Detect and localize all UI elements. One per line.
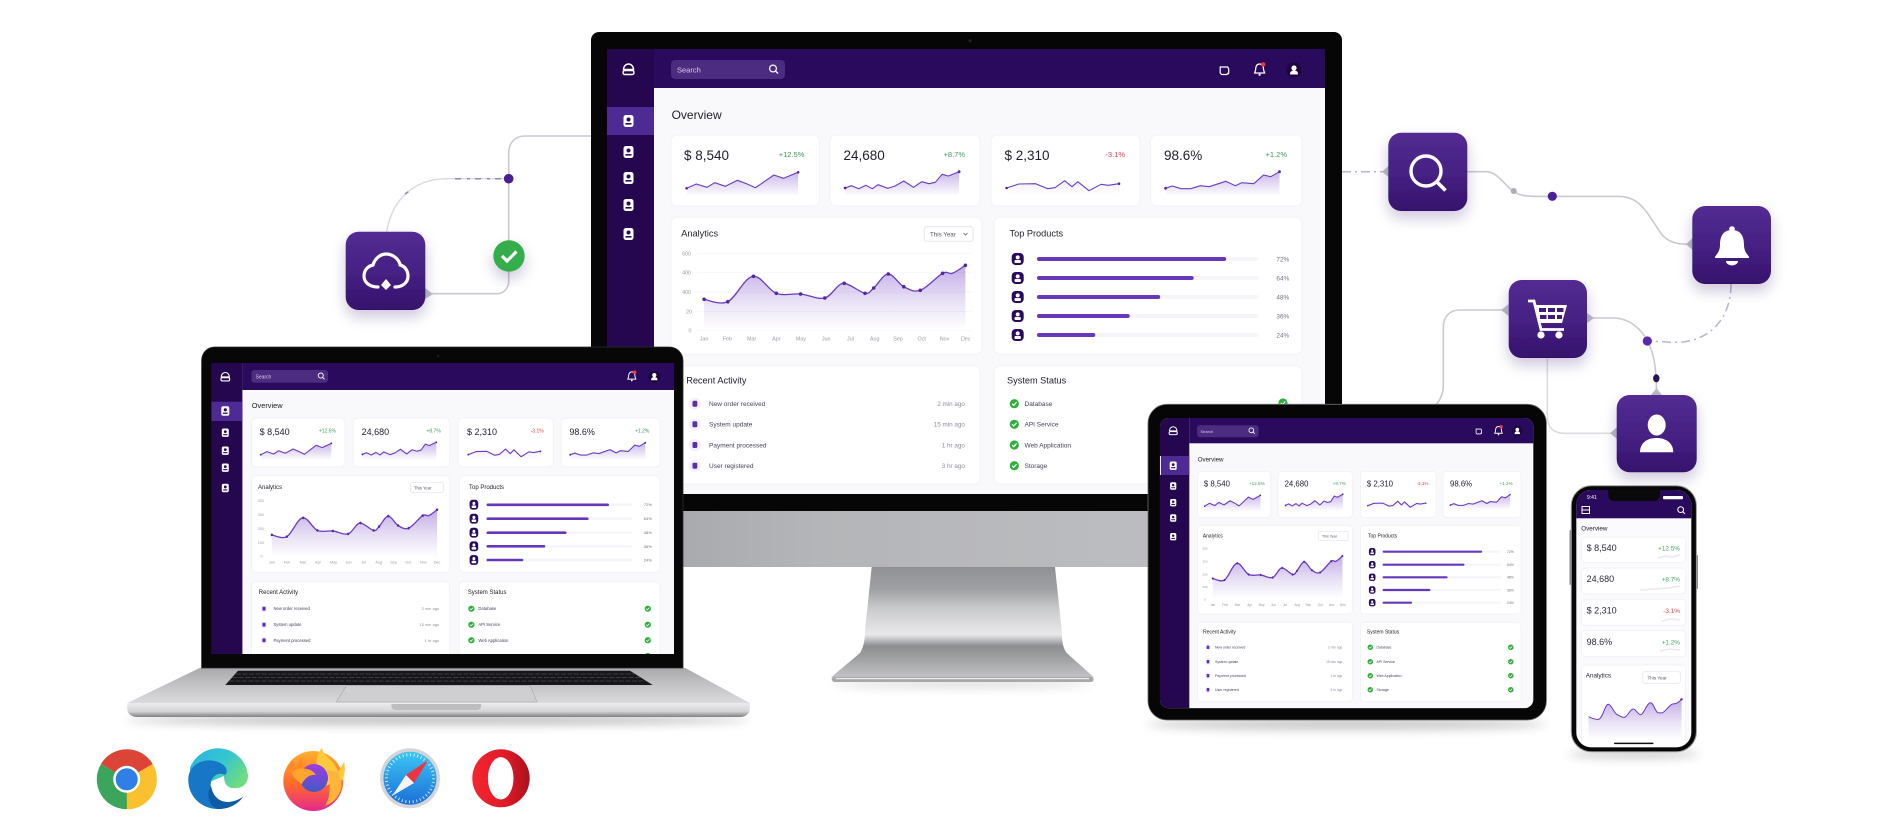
- laptop system status panel: System Status: [468, 590, 506, 596]
- laptop shadow: [126, 716, 750, 724]
- tablet system status panel: [1360, 622, 1521, 702]
- laptop analytics panel: Jun: [346, 561, 352, 565]
- KPI card: cost: [991, 135, 1140, 206]
- tablet top products panel: 24%: [1507, 601, 1514, 605]
- panel: recent activity: Payment processed: [709, 442, 767, 449]
- laptop recent activity panel: 15 min ago: [419, 622, 440, 627]
- tablet analytics panel: Oct: [1318, 603, 1323, 607]
- panel: analytics chart: Nov: [940, 337, 950, 343]
- tablet KPI cards: +8.7%: [1333, 481, 1346, 486]
- panel: analytics chart: Apr: [772, 337, 781, 343]
- tablet analytics panel: Nov: [1329, 603, 1335, 607]
- panel: analytics chart: This Year: [930, 232, 956, 238]
- tablet system status panel: API Service: [1376, 660, 1395, 664]
- tablet recent activity panel: User registered: [1215, 688, 1239, 692]
- laptop top products panel: 48%: [644, 530, 652, 535]
- monitor screen background: [607, 49, 1325, 494]
- laptop system status panel: Web Application: [478, 638, 509, 643]
- phone home indicator: [1614, 743, 1654, 744]
- phone analytics panel: [1582, 665, 1686, 755]
- panel: system status: Web Application: [1024, 442, 1071, 449]
- tablet top products panel: Top Products: [1368, 533, 1398, 539]
- laptop analytics panel: May: [330, 561, 337, 565]
- laptop analytics panel: Aug: [375, 561, 382, 565]
- panel: analytics chart: Jun: [822, 337, 831, 343]
- icon: user tile: [1617, 395, 1697, 472]
- phone KPI list: 98.6%: [1587, 637, 1612, 647]
- panel: analytics chart: Feb: [723, 337, 732, 343]
- KPI card: uptime: +1.2%: [1266, 150, 1287, 159]
- tablet system status panel: Storage: [1376, 688, 1389, 692]
- panel: recent activity: New order received: [709, 401, 766, 408]
- tablet screen: [1160, 418, 1533, 708]
- connector lines: left of monitor: [387, 136, 591, 299]
- laptop KPI cards: +1.2%: [635, 429, 650, 435]
- laptop top bar: Search: [256, 374, 272, 380]
- tablet recent activity panel: 1 hr ago: [1330, 674, 1343, 678]
- phone KPI list: -3.1%: [1663, 608, 1680, 615]
- KPI card: revenue: +12.5%: [779, 150, 805, 159]
- laptop system status panel: Database: [478, 606, 497, 611]
- tablet analytics panel: 300: [1202, 559, 1208, 563]
- panel: analytics chart: Dec: [961, 337, 971, 343]
- icon: shopping cart tile: [1509, 280, 1587, 358]
- laptop sidebar: [211, 363, 242, 654]
- laptop recent activity panel: System update: [274, 622, 302, 627]
- laptop recent activity panel: 2 min ago: [422, 606, 440, 611]
- KPI card: users: 24,680: [844, 148, 885, 163]
- tablet system status panel: Web Application: [1376, 674, 1402, 678]
- tablet analytics panel: This Year: [1322, 534, 1338, 538]
- laptop recent activity panel: Payment processed: [274, 638, 311, 643]
- laptop analytics panel: This Year: [414, 485, 432, 490]
- laptop recent activity panel: Recent Activity: [259, 590, 298, 596]
- laptop KPI cards: $ 8,540: [260, 427, 290, 437]
- tablet KPI cards: $ 8,540: [1204, 480, 1231, 489]
- tablet recent activity panel: System update: [1215, 660, 1238, 664]
- KPI card: revenue: $ 8,540: [684, 148, 729, 163]
- panel: top products: Top Products: [1010, 229, 1064, 239]
- tablet analytics panel: Aug: [1294, 603, 1300, 607]
- panel: system status: API Service: [1024, 422, 1059, 429]
- laptop analytics panel: 100: [258, 541, 264, 545]
- panel: analytics chart: Oct: [918, 337, 926, 343]
- tablet recent activity panel: 3 hr ago: [1330, 688, 1343, 692]
- tablet heading: Overview: Overview: [1198, 456, 1224, 463]
- tablet KPI cards: 98.6%: [1450, 480, 1472, 489]
- laptop analytics panel: Apr: [315, 561, 322, 565]
- tablet analytics panel: Jul: [1283, 603, 1287, 607]
- tablet analytics panel: 100: [1202, 585, 1208, 589]
- tablet KPI cards: [1197, 471, 1521, 518]
- tablet analytics panel: Sep: [1305, 603, 1311, 607]
- tablet top bar: [1189, 418, 1533, 443]
- panel: system status: Database: [1024, 401, 1053, 408]
- panel: recent activity: 1 hr ago: [942, 442, 965, 449]
- laptop analytics panel: 500: [258, 499, 264, 503]
- laptop KPI cards: +12.5%: [319, 429, 337, 435]
- icon: Safari browser: [380, 748, 440, 808]
- tablet analytics panel: Analytics: [1203, 533, 1223, 539]
- connector node: cart-to-user dot: [1643, 336, 1652, 346]
- laptop recent activity panel: [251, 582, 450, 654]
- tablet analytics panel: Mar: [1235, 603, 1241, 607]
- panel: analytics chart: 600: [682, 252, 691, 258]
- monitor heading: Overview: Overview: [672, 108, 722, 122]
- laptop analytics panel: Jan: [269, 561, 275, 565]
- icon: Firefox browser: [283, 748, 345, 811]
- tablet sidebar: [1160, 418, 1189, 708]
- tablet KPI cards: 24,680: [1285, 480, 1309, 489]
- monitor top bar: [654, 49, 1325, 88]
- laptop analytics panel: Feb: [284, 561, 290, 565]
- laptop top bar: [242, 363, 674, 390]
- phone header: 9:41: [1587, 495, 1597, 501]
- tablet analytics panel: Jun: [1271, 603, 1276, 607]
- panel: system status: System Status: [1007, 376, 1067, 386]
- tablet KPI cards: +12.5%: [1249, 481, 1265, 486]
- phone KPI list: 24,680: [1587, 574, 1614, 584]
- tablet analytics panel: Feb: [1222, 603, 1228, 607]
- tablet recent activity panel: Recent Activity: [1203, 630, 1236, 636]
- panel: analytics chart: 0: [689, 328, 692, 334]
- panel: recent activity: User registered: [709, 463, 754, 470]
- laptop KPI cards: 98.6%: [569, 427, 595, 437]
- phone KPI list: +8.7%: [1662, 576, 1680, 583]
- tablet KPI cards: +1.2%: [1500, 481, 1513, 486]
- tablet top products panel: 36%: [1507, 588, 1514, 592]
- icon: Opera browser: [472, 749, 530, 807]
- phone analytics panel: This Year: [1648, 676, 1667, 680]
- panel: top products: 36%: [1276, 313, 1290, 320]
- panel: recent activity: Recent Activity: [686, 376, 747, 386]
- tablet analytics panel: May: [1259, 603, 1265, 607]
- tablet analytics panel: 500: [1202, 547, 1208, 551]
- laptop top products panel: [459, 476, 660, 573]
- laptop KPI cards: [251, 418, 660, 467]
- tablet top bar: Search: [1200, 429, 1213, 434]
- KPI card: users: [830, 135, 980, 206]
- phone body: [1570, 486, 1698, 752]
- panel: recent activity: 15 min ago: [934, 422, 965, 429]
- connector lines: right of monitor: [1342, 166, 1731, 439]
- tablet analytics panel: 200: [1202, 572, 1208, 576]
- laptop recent activity panel: 1 hr ago: [425, 638, 440, 643]
- laptop analytics panel: [251, 476, 450, 573]
- tablet recent activity panel: New order received: [1215, 646, 1245, 650]
- laptop base: [127, 668, 750, 717]
- laptop KPI cards: $ 2,310: [467, 427, 497, 437]
- KPI card: revenue: [671, 135, 820, 206]
- monitor stand: [832, 567, 1094, 688]
- panel: system status: Storage: [1024, 463, 1048, 470]
- tablet analytics panel: Dec: [1340, 603, 1346, 607]
- phone screen: [1576, 490, 1691, 755]
- panel: top products: [994, 217, 1302, 354]
- icon: cloud sync tile: [346, 232, 425, 310]
- connector node: search-to-bell dot: [1548, 192, 1557, 201]
- panel: analytics chart: Sep: [893, 337, 903, 343]
- panel: recent activity: 2 min ago: [937, 401, 965, 408]
- panel: top products: 72%: [1276, 256, 1290, 263]
- tablet analytics panel: Jan: [1210, 603, 1215, 607]
- tablet analytics panel: 0: [1204, 597, 1206, 601]
- tablet top products panel: 72%: [1507, 550, 1514, 554]
- phone header: [1576, 490, 1691, 518]
- KPI card: uptime: [1150, 135, 1302, 206]
- tablet system status panel: System Status: [1367, 630, 1400, 636]
- laptop KPI cards: -3.1%: [531, 429, 544, 435]
- tablet shadow: [1147, 718, 1547, 730]
- laptop top products panel: 72%: [644, 502, 652, 507]
- laptop analytics panel: Dec: [434, 561, 441, 565]
- phone shadow: [1568, 750, 1700, 758]
- connector node: user dot: [1653, 374, 1660, 382]
- panel: analytics chart: Jan: [700, 337, 708, 343]
- laptop top products panel: 64%: [644, 516, 652, 521]
- laptop analytics panel: Nov: [420, 561, 427, 565]
- tablet body: [1148, 404, 1546, 720]
- laptop analytics panel: 200: [258, 527, 264, 531]
- tablet top products panel: 64%: [1507, 563, 1514, 567]
- phone heading: Overview: Overview: [1581, 525, 1608, 532]
- panel: top products: 24%: [1276, 332, 1290, 339]
- panel: top products: 64%: [1276, 275, 1290, 282]
- panel: recent activity: System update: [709, 422, 753, 429]
- panel: analytics chart: Aug: [870, 337, 879, 343]
- icon: Edge browser: [188, 748, 248, 809]
- laptop screen: [211, 363, 674, 672]
- laptop analytics panel: Oct: [405, 561, 412, 565]
- KPI card: cost: $ 2,310: [1004, 148, 1050, 163]
- panel: analytics chart: [671, 217, 982, 354]
- laptop KPI cards: +8.7%: [426, 429, 441, 435]
- icon: search tile: [1388, 133, 1467, 211]
- phone KPI list: $ 8,540: [1587, 543, 1617, 553]
- laptop heading: Overview: Overview: [252, 401, 283, 410]
- connector node: monitor-side dot: [504, 174, 514, 184]
- phone KPI list: $ 2,310: [1587, 605, 1617, 615]
- tablet recent activity panel: [1197, 622, 1353, 702]
- tablet top products panel: 48%: [1507, 576, 1514, 580]
- laptop top products panel: 24%: [644, 558, 652, 562]
- phone analytics panel: Analytics: [1586, 672, 1611, 679]
- tablet recent activity panel: 15 min ago: [1326, 660, 1343, 664]
- tablet top products panel: [1360, 525, 1521, 614]
- tablet analytics panel: Apr: [1247, 603, 1253, 607]
- tablet KPI cards: $ 2,310: [1367, 480, 1394, 489]
- panel: analytics chart: 20: [686, 309, 692, 315]
- tablet analytics panel: [1197, 525, 1353, 614]
- laptop system status panel: API Service: [478, 622, 501, 627]
- panel: analytics chart: Analytics: [681, 229, 718, 239]
- panel: system status: [994, 366, 1302, 484]
- phone KPI list: [1582, 537, 1686, 657]
- panel: analytics chart: Jul: [847, 337, 854, 343]
- laptop analytics panel: Mar: [300, 561, 307, 565]
- laptop recent activity panel: New order received: [274, 606, 310, 611]
- laptop analytics panel: 0: [260, 554, 262, 558]
- laptop lid: [202, 347, 683, 668]
- icon: green check badge: [493, 240, 525, 272]
- laptop top products panel: 36%: [644, 544, 652, 549]
- phone KPI list: +12.5%: [1658, 546, 1680, 553]
- panel: recent activity: 3 hr ago: [942, 463, 965, 470]
- icon: Chrome browser: [97, 749, 157, 809]
- monitor sidebar: [607, 49, 654, 494]
- icon: bell tile: [1692, 206, 1771, 284]
- tablet KPI cards: -3.1%: [1416, 481, 1428, 486]
- laptop analytics panel: Analytics: [258, 485, 282, 491]
- monitor top bar: Search: [677, 66, 701, 74]
- panel: analytics chart: May: [796, 337, 806, 343]
- KPI card: users: +8.7%: [944, 150, 965, 159]
- laptop analytics panel: Jul: [361, 561, 366, 565]
- panel: analytics chart: 400: [682, 271, 691, 277]
- KPI card: uptime: 98.6%: [1164, 148, 1202, 163]
- phone KPI list: +1.2%: [1662, 639, 1680, 646]
- KPI card: cost: -3.1%: [1105, 150, 1125, 159]
- monitor body: [591, 32, 1342, 567]
- panel: recent activity: [671, 366, 980, 484]
- panel: analytics chart: Mar: [747, 337, 756, 343]
- laptop top products panel: Top Products: [469, 485, 504, 491]
- panel: top products: 48%: [1276, 294, 1290, 301]
- laptop analytics panel: Sep: [390, 561, 397, 565]
- panel: analytics chart: 400: [682, 290, 691, 296]
- laptop KPI cards: 24,680: [362, 427, 389, 437]
- tablet recent activity panel: Payment processed: [1215, 674, 1246, 678]
- laptop system status panel: [459, 582, 660, 654]
- laptop analytics panel: 300: [258, 513, 264, 517]
- tablet recent activity panel: 2 min ago: [1328, 646, 1343, 650]
- tablet system status panel: Database: [1376, 646, 1392, 650]
